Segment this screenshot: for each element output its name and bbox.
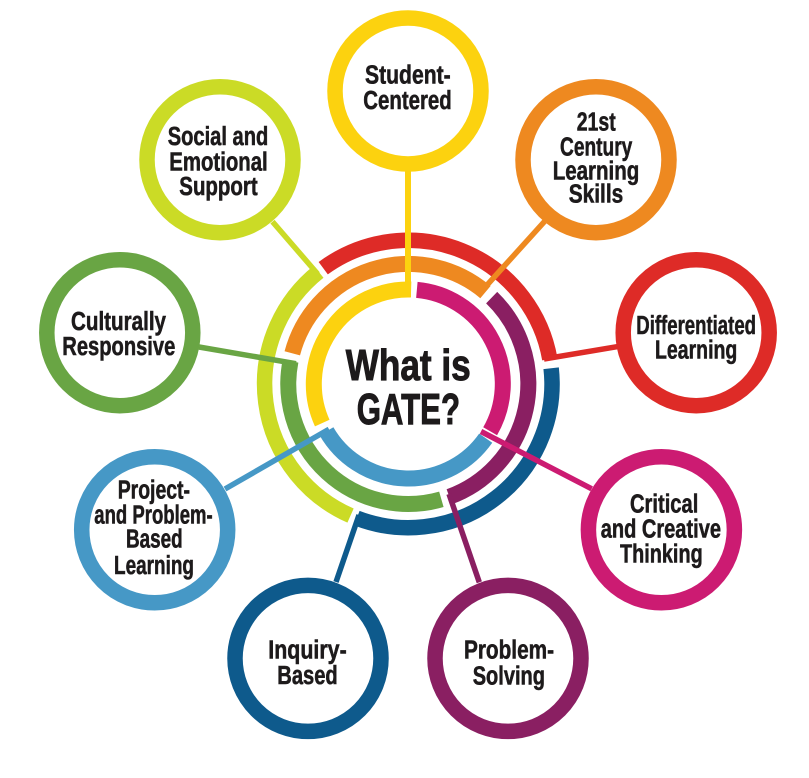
node: Student-Centered [335, 18, 481, 164]
node: Inquiry-Based: Inquiry- [268, 637, 347, 665]
node: Problem-Solving: Problem- [464, 637, 554, 665]
node: Social and Emotional Support: Support [179, 173, 258, 201]
connector: Critical and Creative Thinking [481, 432, 592, 489]
connector: Differentiated Learning [544, 347, 617, 359]
node: Culturally Responsive: Culturally [71, 308, 167, 336]
node: Inquiry-Based [235, 585, 381, 731]
connector: Problem-Solving [449, 494, 479, 582]
node: Social and Emotional Support [147, 87, 293, 233]
node: Critical and Creative Thinking [588, 457, 734, 603]
node: Student-Centered: Student- [365, 61, 451, 89]
central title [346, 342, 471, 434]
node: Problem-Solving [435, 585, 581, 731]
node: Differentiated Learning [623, 260, 769, 406]
inner arc: yellow [314, 289, 411, 423]
node: 21st Century Learning Skills: Century [560, 134, 633, 162]
connector: Inquiry-Based [336, 515, 359, 582]
node: Culturally Responsive: Responsive [62, 333, 175, 361]
connector: Student-Centered [405, 168, 411, 297]
node: Critical and Creative Thinking: and Creative [601, 516, 721, 544]
node: Differentiated Learning: Differentiated [636, 312, 756, 340]
node: Project- and Problem-Based Learning: Learning [114, 552, 194, 580]
node: 21st Century Learning Skills: Skills [569, 180, 623, 208]
central title: What is [346, 342, 471, 390]
connector: Project- and Problem-Based Learning [225, 429, 329, 489]
inner arc: light blue [326, 431, 486, 478]
outer arc: red [323, 240, 550, 359]
node: Inquiry-Based: Based [277, 662, 338, 690]
inner arc: magenta [417, 290, 503, 431]
middle arc: orange [292, 264, 485, 353]
central title: GATE? [357, 386, 460, 434]
node: Project- and Problem-Based Learning: and Problem- [94, 501, 213, 529]
node: Social and Emotional Support: Emotional [169, 149, 268, 177]
node: Project- and Problem-Based Learning: Based [126, 526, 183, 554]
node: Critical and Creative Thinking: Thinking [620, 541, 703, 569]
outer arc: lime [265, 272, 351, 516]
connector: 21st Century Learning Skills [483, 222, 544, 290]
node: Differentiated Learning: Learning [655, 336, 737, 364]
node: 21st Century Learning Skills: Learning [553, 157, 639, 185]
node: Project- and Problem-Based Learning: Project- [118, 476, 190, 504]
node: Problem-Solving: Solving [473, 662, 545, 690]
node: Critical and Creative Thinking: Critical [630, 490, 698, 518]
node: 21st Century Learning Skills [523, 87, 669, 233]
middle arc: green [288, 361, 441, 504]
node: Social and Emotional Support: Social and [168, 123, 268, 151]
connector: Culturally Responsive [199, 347, 296, 364]
connector: Social and Emotional Support [272, 222, 318, 274]
node: 21st Century Learning Skills: 21st [577, 109, 616, 137]
node: Culturally Responsive [47, 260, 193, 406]
outer arc: navy [357, 368, 552, 528]
node: Student-Centered: Centered [363, 87, 452, 115]
middle arc: purple [449, 298, 528, 497]
node: Project- and Problem-Based Learning [82, 457, 228, 603]
